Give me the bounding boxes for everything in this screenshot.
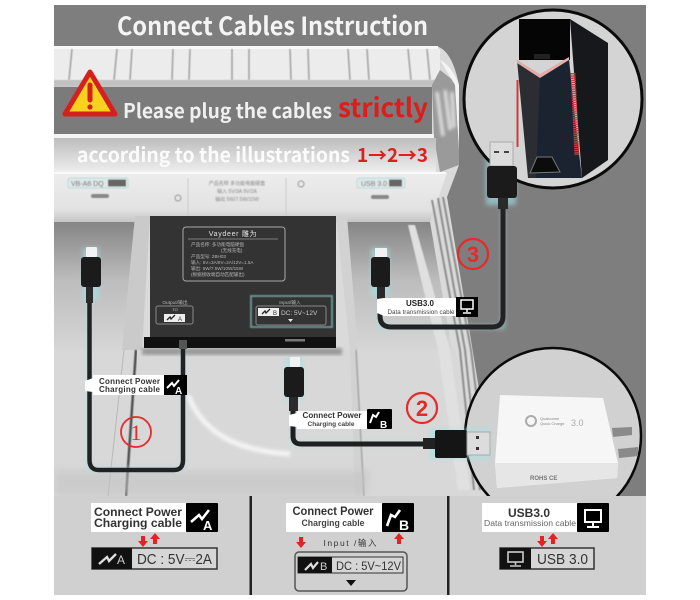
cable 2 label: Charging cable	[308, 421, 355, 428]
legend: cable A: Connect Power	[94, 505, 182, 519]
input label on hub: B	[273, 311, 277, 317]
heading: Connect Cables Instruction	[117, 7, 428, 43]
number 1	[121, 417, 151, 447]
cable 1	[81, 247, 187, 470]
port labels: 产品名称 多功能电脑硬盘	[209, 180, 265, 187]
cable 1 label	[85, 375, 187, 397]
input label on hub: DC: 5V~12V	[281, 310, 318, 317]
legend: cable A: A	[203, 518, 213, 533]
cable 2	[284, 357, 490, 458]
photo background panel	[54, 5, 646, 524]
number 3	[458, 239, 488, 269]
legend: USB	[482, 503, 609, 569]
cable 2 label: Connect Power	[302, 410, 362, 420]
cable 3 label: USB3.0	[406, 299, 435, 308]
legend: USB: USB3.0	[508, 506, 550, 520]
hub device with label plate: 输出: 5W/7.5W/10W/15W	[191, 265, 244, 272]
number 3: 3	[467, 242, 479, 267]
rails and floor	[54, 197, 490, 496]
port labels: VB-A6 DQ	[71, 181, 104, 188]
warning icon	[65, 72, 115, 114]
legend: USB: USB 3.0	[537, 552, 588, 568]
legend: USB: Data transmission cable	[484, 518, 576, 528]
hub device with label plate: 产品型号: 2BH03	[191, 253, 226, 260]
warning line 1: Please plug the cables	[123, 95, 332, 124]
cable 2 label: B	[380, 420, 387, 431]
hub device with label plate: 产品名称: 多功能电脑硬盘	[191, 241, 244, 248]
vent grille	[54, 49, 440, 87]
bottom legend strip	[54, 496, 646, 595]
hub device with label plate: (根据接收端自动匹配输出)	[191, 271, 245, 278]
hub device with label plate: (无线充电)	[221, 247, 243, 254]
hub device with label plate	[144, 216, 336, 348]
legend: cable B: DC : 5V~12V	[336, 561, 401, 573]
cable 3 label: Data transmission cable	[388, 309, 455, 316]
cable glows	[89, 142, 503, 469]
device body	[54, 46, 478, 408]
port labels: 输入 5V/3A 9V/2A	[217, 188, 258, 195]
legend: cable A	[91, 503, 218, 569]
legend: cable A: A	[117, 553, 125, 567]
charger inset	[464, 346, 642, 496]
legend: cable A: Charging cable	[94, 516, 182, 530]
charger inset: Qualcomm	[540, 416, 560, 421]
PC tower inset	[464, 10, 642, 188]
cable 2 label	[289, 409, 392, 431]
hub device with label plate: Vaydeer 雕为	[209, 229, 257, 238]
cable 3 label	[377, 297, 478, 317]
input label on hub	[251, 296, 332, 327]
grey instruction band	[54, 87, 432, 134]
output label on hub: A	[178, 317, 182, 323]
output label on hub: TO	[172, 307, 178, 312]
cable 1 label: Connect Power	[99, 377, 160, 386]
legend: cable B: Connect Power	[292, 504, 374, 518]
warning line 2: 1→2→3	[357, 141, 428, 168]
legend: cable B: B	[399, 517, 409, 533]
hub device with label plate: 输入: 5V=3A/9V=2A/12V=1.5A	[191, 259, 254, 266]
cable 1 label: A	[175, 386, 182, 397]
output label on hub: Output/输出	[162, 299, 188, 306]
port labels: 输出 5W/7.5W/10W	[215, 196, 259, 203]
number 2	[407, 393, 437, 423]
charger inset: ROHS CE	[530, 476, 557, 482]
port labels: USB 3.0	[361, 181, 387, 188]
charger inset: 3.0	[571, 418, 584, 428]
warning line 1: strictly	[338, 88, 428, 125]
charger inset: Quick Charge	[540, 421, 565, 426]
number 2: 2	[416, 396, 428, 421]
port labels	[68, 178, 405, 218]
output label on hub	[156, 299, 193, 324]
legend: cable B: Charging cable	[302, 518, 364, 529]
number 1: 1	[130, 420, 142, 445]
legend: cable B: Input /输入	[324, 538, 377, 548]
legend: cable B	[286, 503, 414, 591]
legend: cable B: B	[320, 561, 327, 573]
cable 1 label: Charging cable	[99, 385, 161, 394]
warning line 2: according to the illustrations	[77, 139, 350, 168]
legend: cable A: DC : 5V⎓2A	[137, 552, 212, 568]
warning line 1	[123, 88, 428, 125]
cable 3	[371, 206, 503, 327]
input label on hub: Input/输入	[279, 299, 301, 306]
USB plug to PC	[487, 142, 517, 209]
